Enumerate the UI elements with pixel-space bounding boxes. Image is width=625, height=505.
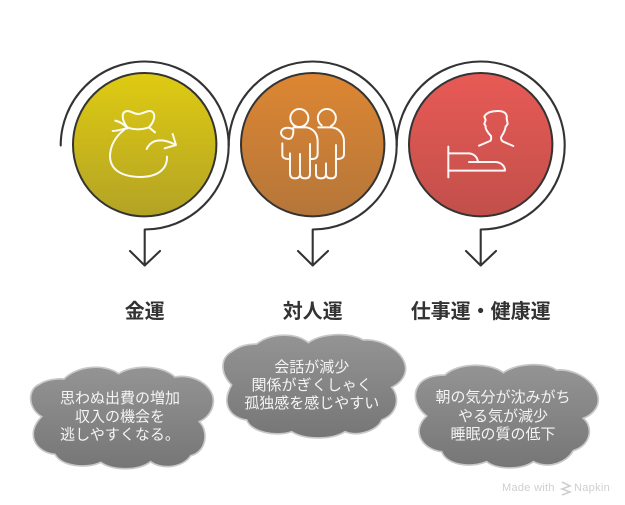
cloud shape	[31, 367, 213, 469]
watermark	[502, 482, 610, 495]
callout text: 関係がぎくしゃく	[252, 377, 372, 394]
callout text: 収入の機会を	[75, 408, 165, 426]
cloud shape	[415, 365, 598, 468]
circle: money	[73, 73, 216, 216]
icon: money bag	[110, 111, 176, 177]
icon: person and bed	[448, 111, 513, 177]
heading: relationships: 対人運	[283, 300, 343, 323]
callout text: 逃しやすくなる。	[60, 426, 180, 444]
icon: napkin logo	[562, 482, 570, 495]
heading: work and health: 仕事運・健康運	[411, 300, 551, 323]
callout text: 会話が減少	[274, 359, 349, 376]
icon: two people	[281, 109, 344, 178]
callout: work and health	[415, 365, 598, 468]
arrow: people ring	[229, 62, 397, 266]
callout text: 朝の気分が沈みがち	[435, 389, 571, 406]
heading: money: 金運	[125, 300, 165, 323]
step 2: people	[229, 62, 397, 266]
callout text: 睡眠の質の低下	[450, 425, 556, 443]
step 3: work and health	[397, 62, 565, 266]
step 1: money	[61, 62, 229, 266]
callout text: 思わぬ出費の増加	[60, 390, 180, 407]
arrow: money ring	[61, 62, 229, 266]
arrow: work ring	[397, 62, 565, 266]
circle: people	[241, 73, 384, 216]
callout: relationships	[223, 335, 406, 438]
callout text: 孤独感を感じやすい	[244, 395, 379, 412]
callout: money	[31, 367, 213, 469]
callout text: やる気が減少	[458, 408, 548, 425]
cloud shape	[223, 335, 406, 438]
watermark brand: Napkin	[574, 482, 610, 494]
watermark label: Made with	[502, 482, 555, 494]
circle: work	[409, 73, 552, 216]
